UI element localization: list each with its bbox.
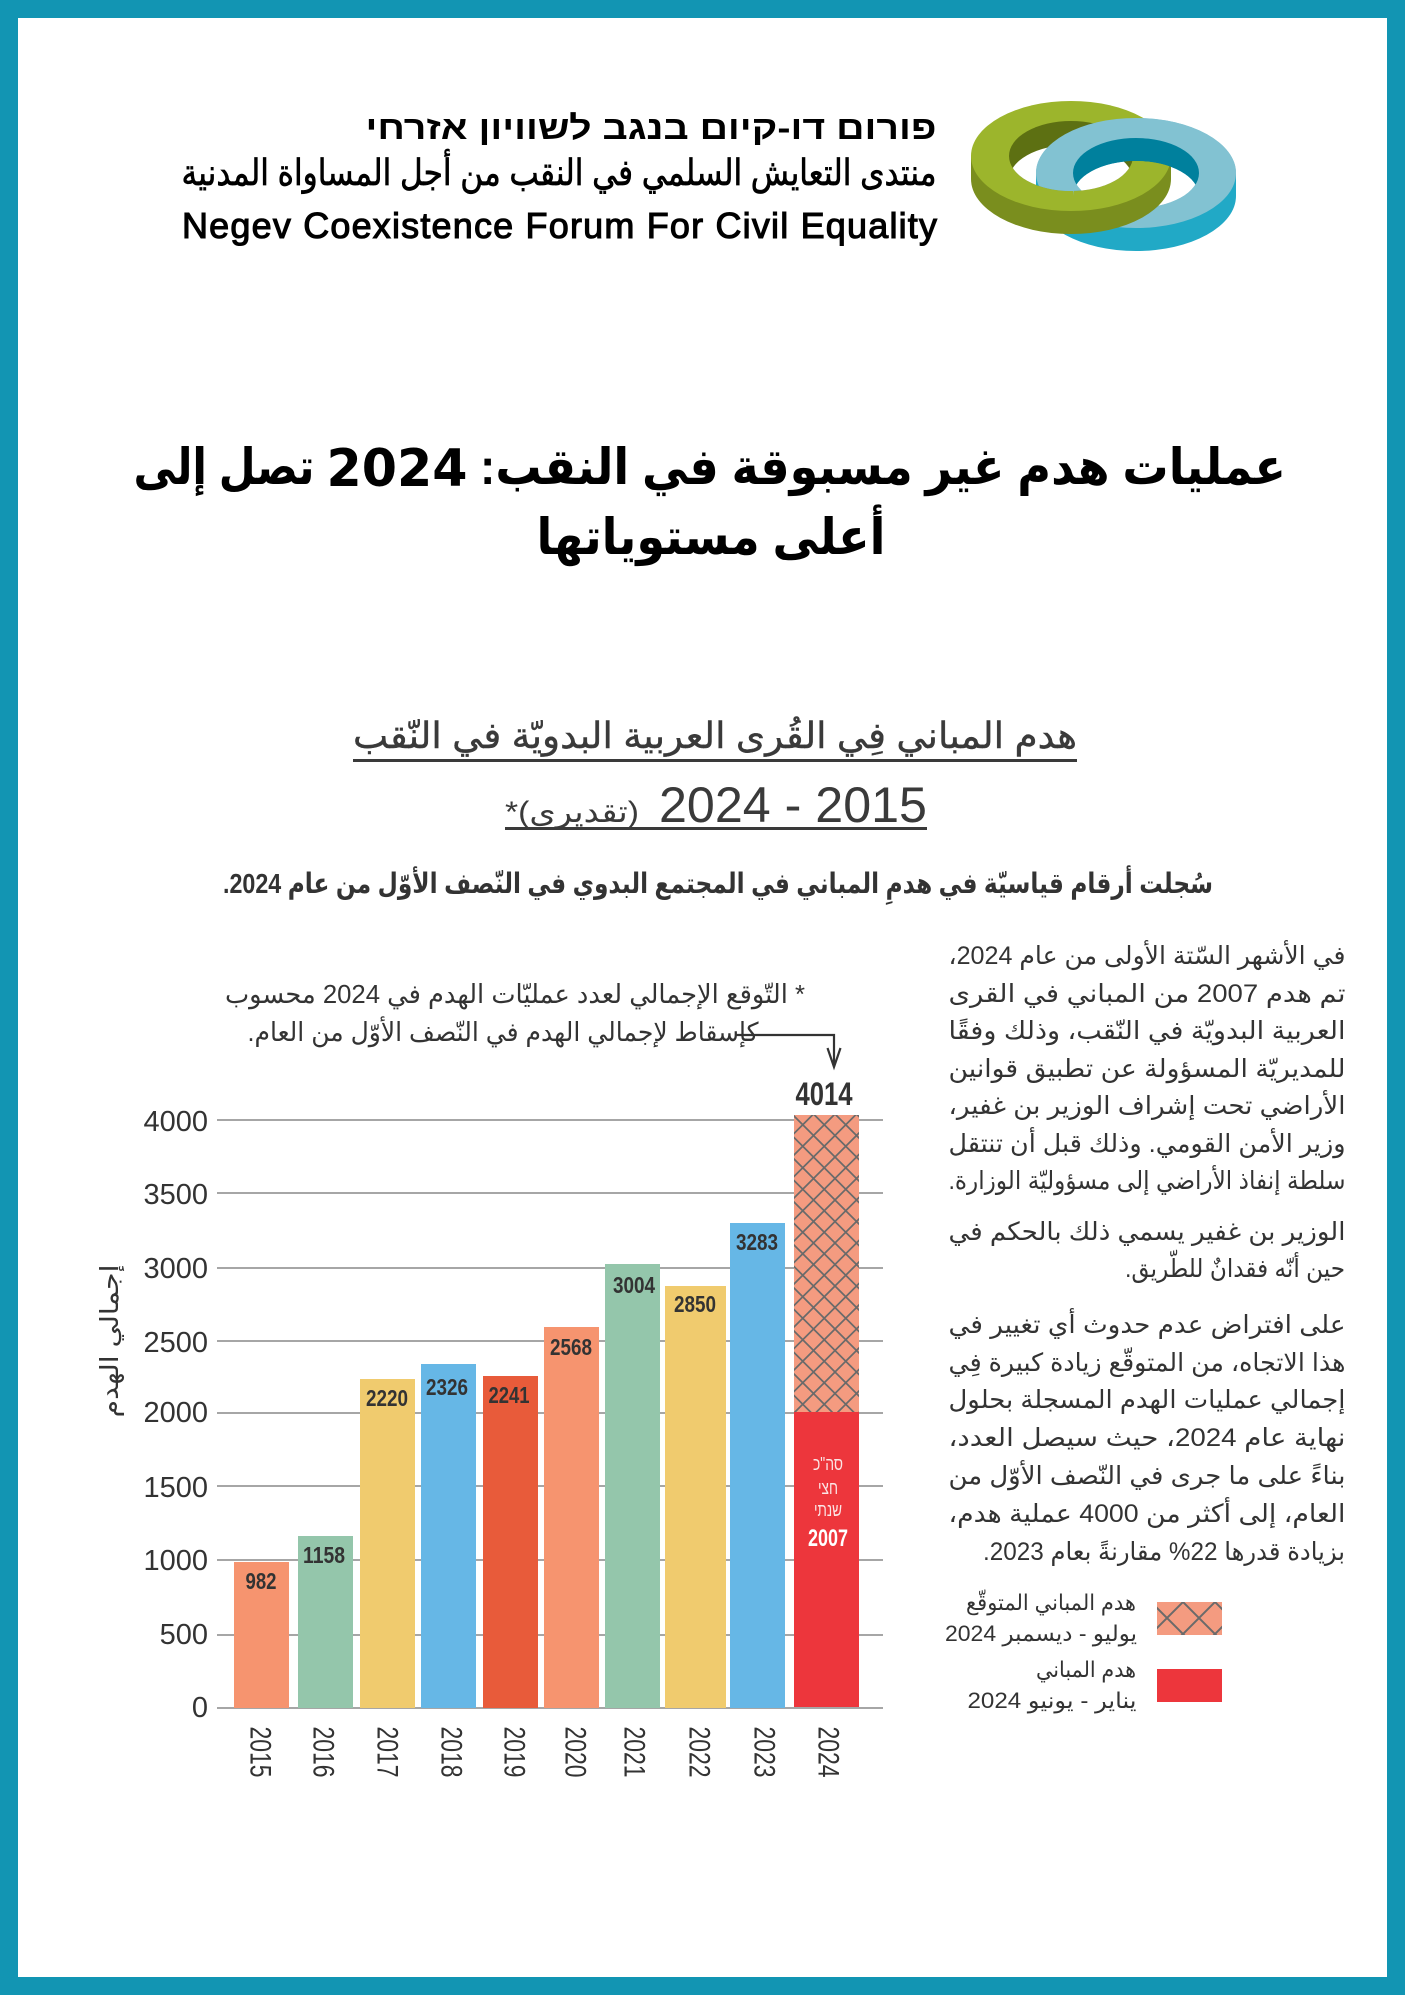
logo: organisation name: Negev Coexistence Forum For Civil Equality [182, 205, 937, 246]
bar value labels: 2220 [366, 1385, 408, 1411]
legend: recorded demolitions: هدم المباني [1036, 1657, 1136, 1683]
bar value labels: 982 [246, 1568, 276, 1594]
text block: first paragraph [948, 939, 1346, 1196]
logo: organisation name: منتدى التعايش السلمي في النقب من أجل المساواة المدنية [182, 149, 936, 194]
title: أعلى مستوياتها [536, 504, 886, 567]
y axis labels: 0 [192, 1692, 208, 1724]
x axis year labels: 2015 [244, 1726, 276, 1778]
logo: organisation name: פורום דו-קיום בנגב לשוויון אזרחי [366, 109, 936, 146]
legend: recorded demolitions [968, 1657, 1222, 1713]
half-year label inside red bar: חצי [818, 1478, 838, 1498]
bar value labels: 2241 [488, 1382, 530, 1408]
x axis year labels: 2023 [748, 1726, 780, 1778]
chart heading: هدم المباني فِي القُرى العربية البدويّة في النّقب [353, 715, 1077, 757]
x axis year labels: 2017 [370, 1726, 404, 1778]
chart note: * التّوقع الإجمالي لعدد عمليّات الهدم في 2024 محسوب [225, 979, 805, 1010]
bars [234, 1115, 859, 1708]
x axis year labels: 2018 [434, 1726, 468, 1778]
bar value labels: 2568 [550, 1334, 592, 1360]
y axis labels: 500 [160, 1619, 208, 1651]
x axis year labels: 2016 [306, 1726, 340, 1778]
legend: projected demolitions: هدم المباني المتوقّع [966, 1589, 1136, 1616]
x axis year labels: 2019 [498, 1726, 530, 1778]
text block: third paragraph: هذا الاتجاه، من المتوقّع زيادة كبيرة فِي [948, 1347, 1346, 1378]
text block: third paragraph: بناءً على ما جرى في النّصف الأوّل من [948, 1459, 1346, 1491]
title: عمليات هدم غير مسبوقة في النقب: [480, 439, 1286, 497]
x axis year labels: 2024 [812, 1726, 844, 1778]
y axis labels: 1000 [143, 1545, 208, 1577]
text block: first paragraph: سلطة إنفاذ الأراضي إلى مسؤوليّة الوزارة. [948, 1164, 1346, 1196]
chart heading: 2015 - 2024 [659, 777, 927, 833]
text block: third paragraph: إجمالي عمليات الهدم المسجلة بحلول [948, 1386, 1346, 1415]
x axis year labels [244, 1726, 844, 1778]
bar value labels: 1158 [303, 1542, 345, 1568]
bar value labels: 3004 [613, 1272, 655, 1298]
y axis labels: 4000 [143, 1106, 208, 1138]
bar value labels: 4014 [796, 1076, 853, 1112]
title: 2024 [326, 439, 468, 499]
chart note [225, 979, 805, 1048]
legend: projected demolitions [945, 1589, 1222, 1646]
chart heading: (تقديري)* [505, 796, 639, 829]
text block: first paragraph: في الأشهر السّتة الأولى من عام 2024، [948, 939, 1346, 971]
bar chart [96, 1076, 883, 1778]
text block: second paragraph [948, 1218, 1346, 1283]
y axis labels: 2000 [143, 1397, 208, 1429]
text block: third paragraph: على افتراض عدم حدوث أي تغيير في [948, 1307, 1346, 1340]
legend: projected demolitions: يوليو - ديسمبر 2024 [945, 1621, 1137, 1646]
bar value labels: 2326 [426, 1374, 468, 1400]
bar value labels: 3283 [736, 1229, 778, 1255]
text block: third paragraph [948, 1307, 1346, 1566]
title: تصل إلى [134, 439, 314, 497]
chart note: كإسقاط لإجمالي الهدم في النّصف الأوّل من العام. [248, 1015, 759, 1048]
text block: third paragraph: العام، إلى أكثر من 4000 عملية هدم، [948, 1496, 1346, 1529]
half-year label inside red bar [808, 1454, 848, 1552]
text block: third paragraph: بزيادة قدرها 22% مقارنةً بعام 2023. [983, 1538, 1345, 1566]
y axis labels: 2500 [143, 1327, 208, 1359]
text block: first paragraph: للمديريّة المسؤولة عن تطبيق قوانين [948, 1055, 1346, 1084]
x axis year labels: 2022 [682, 1726, 716, 1778]
logo: interlocked rings [971, 101, 1236, 251]
x axis year labels: 2021 [618, 1726, 650, 1778]
chart heading [353, 715, 1077, 833]
y axis title: إجمالي الهدم [96, 1264, 125, 1418]
arrow to 2024 bar [735, 1035, 840, 1067]
bar value labels: 2850 [674, 1291, 716, 1317]
half-year label inside red bar: שנתי [814, 1500, 842, 1520]
text block: first paragraph: الأراضي تحت إشراف الوزير بن غفير، [948, 1089, 1346, 1121]
text block: first paragraph: وزير الأمن القومي. وذلك قبل أن تنتقل [948, 1126, 1346, 1159]
y axis labels: 3500 [143, 1179, 208, 1211]
half-year label inside red bar: סה"כ [813, 1454, 843, 1474]
legend: recorded demolitions: يناير - يونيو 2024 [968, 1688, 1136, 1713]
title [134, 439, 1286, 567]
y axis labels: 3000 [143, 1253, 208, 1285]
y axis labels: 1500 [143, 1472, 208, 1504]
half-year label inside red bar: 2007 [808, 1525, 848, 1552]
logo: organisation name [182, 109, 937, 246]
text block: first paragraph: العربية البدويّة في النّقب، وذلك وفقًا [948, 1017, 1346, 1046]
text block: second paragraph: الوزير بن غفير يسمي ذلك بالحكم في [948, 1218, 1346, 1247]
text block: third paragraph: نهاية عام 2024، حيث سيصل العدد، [948, 1424, 1346, 1453]
text block: second paragraph: حين أنّه فقدانٌ للطّريق. [1125, 1250, 1345, 1283]
bar value labels [246, 1076, 853, 1594]
text block: first paragraph: تم هدم 2007 من المباني في القرى [948, 980, 1346, 1009]
x axis year labels: 2020 [558, 1726, 592, 1778]
subheading: سُجلت أرقام قياسيّة في هدمِ المباني في المجتمع البدوي في النّصف الأوّل من عام 2024. [223, 865, 1213, 905]
y axis labels [143, 1106, 208, 1724]
